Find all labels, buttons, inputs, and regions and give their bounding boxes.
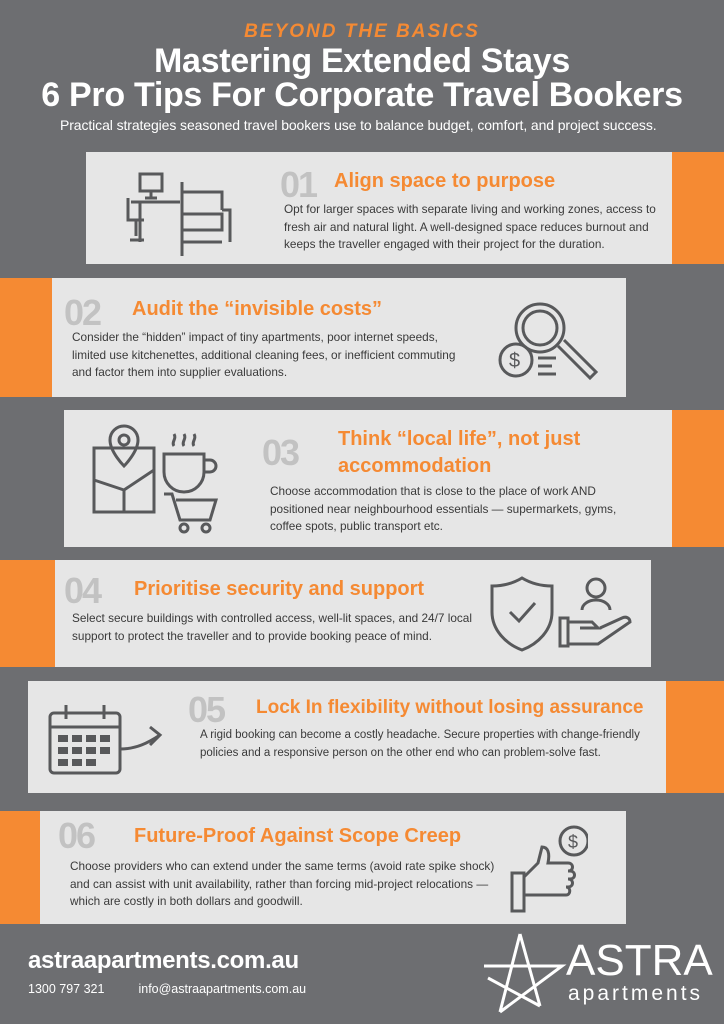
heading: Prioritise security and support	[134, 578, 424, 600]
panel: tip 04	[0, 560, 651, 667]
text: Consider the “hidden” impact of tiny apartments, poor internet speeds, limited use kitchenettes, additional cleaning fees, or inefficient commuting and factor them into supplier evaluations.	[72, 330, 455, 379]
panel: tip 06: 06	[58, 815, 94, 856]
title	[41, 42, 683, 114]
logo: ASTRA	[566, 936, 713, 985]
footer: contact: 1300 797 321 info@astraapartments.com.au	[28, 982, 306, 996]
logo: apartments	[568, 982, 703, 1005]
kicker: BEYOND THE BASICS	[244, 21, 480, 42]
icon: calendar arrow	[48, 705, 162, 774]
title: 6 Pro Tips For Corporate Travel Bookers	[41, 76, 683, 114]
panel: tip 05	[28, 681, 724, 793]
text: Choose accommodation that is close to the place of work AND positioned near neighbourhood essentials — supermarkets, gyms, coffee spots, public transport etc.	[270, 484, 616, 533]
icon: magnifier with dollar: $	[509, 350, 520, 372]
heading: Think “local life”, not just accommodation	[338, 428, 580, 477]
icon: map, coffee, cart	[92, 424, 218, 534]
icon: desk and sofa	[126, 172, 232, 256]
icon: magnifier with dollar	[498, 302, 598, 380]
panel: tip 02: 02	[64, 292, 100, 333]
text: Select secure buildings with controlled access, well-lit spaces, and 24/7 local support to protect the traveller and to provide booking peace of mind.	[72, 611, 472, 642]
heading: Audit the “invisible costs”	[132, 298, 382, 320]
panel: tip 01	[86, 152, 724, 264]
panel: tip 01: Align space to purpose	[334, 170, 555, 192]
panel: tip 05: 05	[188, 689, 224, 730]
heading: 01	[280, 164, 316, 205]
text: Opt for larger spaces with separate living and working zones, access to fresh air and natural light. A well-designed space reduces burnout and keeps the traveller engaged with their project for the duration.	[284, 202, 656, 251]
panel: tip 03	[64, 410, 724, 547]
icon: thumbs up dollar	[510, 826, 588, 912]
panel: tip 03: 03	[262, 432, 298, 473]
footer: website: astraapartments.com.au	[28, 947, 299, 974]
panel: tip 06	[0, 811, 626, 924]
logo	[484, 934, 713, 1014]
heading: Future-Proof Against Scope Creep	[134, 825, 461, 847]
subtitle: Practical strategies seasoned travel bookers use to balance budget, comfort, and project success.	[60, 117, 657, 133]
text: A rigid booking can become a costly headache. Secure properties with change-friendly policies and a responsive person on the other end who can problem-solve fast.	[200, 729, 640, 758]
title: Mastering Extended Stays	[154, 42, 570, 80]
panel: tip 02	[0, 278, 626, 397]
text: Choose providers who can extend under the same terms (avoid rate spike shock) and can assist with unit availability, rather than forcing mid-project relocations — which are costly in both dollars and goodwill.	[70, 859, 494, 908]
panel: tip 04: 04	[64, 570, 100, 611]
icon: shield and support	[490, 576, 632, 652]
icon: thumbs up dollar: $	[568, 832, 578, 852]
heading: Lock In flexibility without losing assurance	[256, 697, 643, 718]
